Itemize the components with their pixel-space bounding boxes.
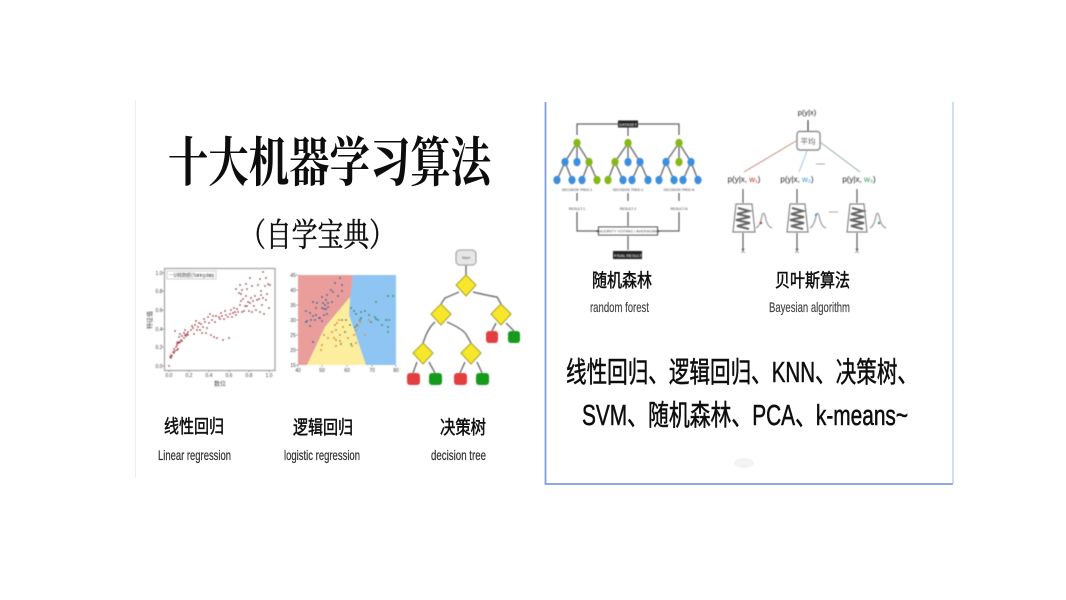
chart: logistic regression regions: 70 xyxy=(369,368,375,374)
chart: linear regression scatter: 0.0 xyxy=(166,373,173,379)
chart: logistic regression regions: 30 xyxy=(290,318,296,324)
label: decision tree: 决策树 xyxy=(440,417,486,438)
diagram: random forest: DECISION TREE-N xyxy=(664,188,695,192)
title: 十大机器学习算法 xyxy=(168,133,494,193)
subtitle: （自学宝典） xyxy=(240,217,395,254)
label: linear regression xyxy=(158,416,231,463)
chart: linear regression scatter xyxy=(146,268,275,388)
diagram: bayesian xyxy=(728,108,886,255)
label: logistic regression xyxy=(284,417,360,463)
chart: linear regression scatter: 数位 xyxy=(214,380,226,388)
label: linear regression: Linear regression xyxy=(158,447,231,463)
diagram: random forest: RESULT-1 xyxy=(569,207,585,211)
diagram: random forest: DECISION TREE-1 xyxy=(562,188,592,192)
diagram: bayesian: X xyxy=(741,249,745,255)
chart: logistic regression regions: 20 xyxy=(290,348,296,354)
chart: logistic regression regions xyxy=(290,273,399,374)
diagram: bayesian: p(y|x, w₂) xyxy=(780,175,814,184)
label: decision tree xyxy=(431,417,486,463)
diagram: bayesian: p(y|x, w₃) xyxy=(842,175,876,184)
diagram: bayesian: X xyxy=(795,249,799,255)
chart: linear regression scatter: 一训练数据 (Training data) xyxy=(169,272,214,279)
diagram: random forest: RESULT-N xyxy=(670,207,688,211)
chart: linear regression scatter: 特征值 xyxy=(146,311,154,329)
diagram: random forest: MAJORITY VOTING / AVERAGING xyxy=(596,228,660,234)
diagram: random forest: DECISION TREE-2 xyxy=(613,188,643,192)
chart: logistic regression regions: 50 xyxy=(319,368,325,374)
text: algorithm list xyxy=(566,356,918,431)
chart: linear regression scatter: 0.4 xyxy=(156,327,163,333)
diagram: random forest: RESULT-2 xyxy=(620,207,636,211)
chart: linear regression scatter: 0.2 xyxy=(156,345,163,351)
label: linear regression: 线性回归 xyxy=(164,416,224,437)
chart: logistic regression regions: 40 xyxy=(295,368,301,374)
diagram: random forest: FINAL RESULT xyxy=(614,253,642,258)
label: random forest: 随机森林 xyxy=(592,270,652,291)
label: bayesian algorithm: Bayesian algorithm xyxy=(769,299,850,315)
chart: linear regression scatter: 0.0 xyxy=(156,364,163,370)
chart: linear regression scatter: 1.0 xyxy=(266,373,273,379)
diagram: random forest: DATASET xyxy=(619,122,637,127)
chart: logistic regression regions: 40 xyxy=(290,288,296,294)
label: random forest xyxy=(590,270,652,315)
diagram: random forest xyxy=(553,120,702,259)
label: decision tree: decision tree xyxy=(431,447,486,463)
chart: logistic regression regions: 80 xyxy=(393,368,399,374)
label: random forest: random forest xyxy=(590,299,649,315)
chart: logistic regression regions: 15 xyxy=(290,363,296,369)
diagram: bayesian: X xyxy=(855,249,859,255)
panel: right xyxy=(546,102,953,484)
chart: decision tree: Start xyxy=(462,255,471,260)
text: algorithm list: 线性回归、逻辑回归、KNN、决策树、 xyxy=(566,356,918,388)
chart: linear regression scatter: 0.2 xyxy=(186,373,193,379)
chart: linear regression scatter: 1.0 xyxy=(156,271,163,277)
chart: linear regression scatter: 0.6 xyxy=(156,308,163,314)
chart: linear regression scatter: 0.8 xyxy=(156,289,163,295)
chart: linear regression scatter: 0.6 xyxy=(226,373,233,379)
chart: decision tree xyxy=(407,250,520,385)
chart: linear regression scatter: 0.8 xyxy=(246,373,253,379)
diagram: bayesian: 平均 xyxy=(800,136,816,146)
chart: logistic regression regions: 35 xyxy=(290,303,296,309)
chart: logistic regression regions: 45 xyxy=(290,273,296,279)
text: algorithm list: SVM、随机森林、PCA、k-means~ xyxy=(582,399,908,431)
watermark xyxy=(734,458,754,468)
label: logistic regression: logistic regression xyxy=(284,447,360,463)
diagram: bayesian: p(y|x) xyxy=(798,108,817,117)
diagram: bayesian: p(y|x, w₁) xyxy=(728,175,761,184)
label: logistic regression: 逻辑回归 xyxy=(293,417,353,438)
chart: logistic regression regions: 60 xyxy=(344,368,350,374)
chart: linear regression scatter: 0.4 xyxy=(206,373,213,379)
chart: logistic regression regions: 25 xyxy=(290,333,296,339)
label: bayesian algorithm: 贝叶斯算法 xyxy=(775,270,850,291)
label: bayesian algorithm xyxy=(769,270,850,315)
panel: left xyxy=(135,100,545,478)
